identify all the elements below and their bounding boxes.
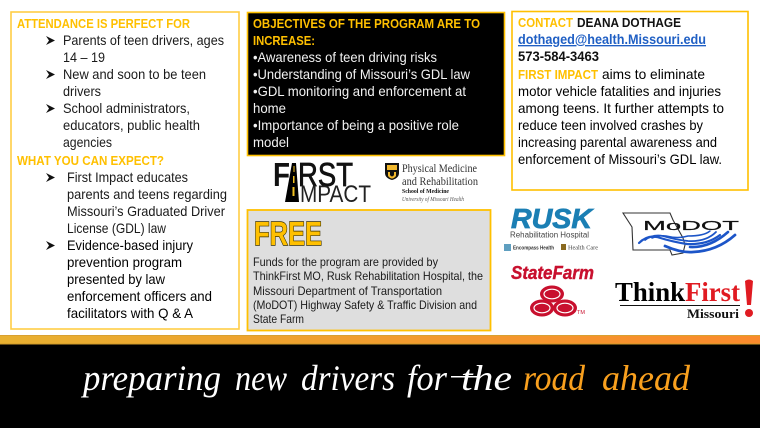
logo: Rusk Rehabilitation Hospital: Rehabilitation Hospital: [510, 230, 589, 240]
banner: tagline: ahead: [602, 358, 691, 398]
list: attendees: Parents of teen drivers, ages: [63, 32, 224, 48]
panel: free: [248, 210, 490, 330]
list: objectives: [253, 49, 471, 150]
logo: MoDOT: MoDOT: [643, 219, 740, 233]
logo: First Impact: MPACT: [300, 181, 371, 208]
logo: First Impact: [273, 156, 371, 208]
logo: State Farm: StateFarm: [511, 263, 594, 283]
logo: State Farm: TM: [577, 310, 585, 316]
logo: Physical Medicine and Rehabilitation: University of Missouri Health: [402, 196, 464, 203]
list: expectations: facilitators with Q & A: [67, 305, 194, 321]
logo: Rusk Rehabilitation Hospital: Health Care: [568, 246, 598, 252]
funding text: Missouri Department of Transportation: [253, 284, 442, 298]
list: attendees: educators, public health: [63, 117, 200, 133]
list: expectations: prevention program: [67, 254, 182, 270]
panel: contact and mission: [512, 12, 748, 190]
banner: tagline: for: [407, 358, 448, 398]
logo: Rusk Rehabilitation Hospital: Encompass Health: [513, 246, 555, 252]
funding text: [253, 255, 483, 326]
logo: ThinkFirst Missouri: Missouri: [687, 306, 739, 321]
logo: MoDOT: [623, 213, 740, 255]
logo: Physical Medicine and Rehabilitation: Physical Medicine: [402, 163, 477, 175]
list: attendees: drivers: [63, 83, 101, 99]
logo: ThinkFirst Missouri: Think: [615, 277, 685, 307]
mission text: enforcement of Missouri’s GDL law.: [518, 151, 722, 167]
list: attendees: New and soon to be teen: [63, 66, 206, 82]
banner: tagline: preparing: [80, 358, 221, 398]
heading: FREE: FREE: [254, 215, 322, 252]
logo: Physical Medicine and Rehabilitation: School of Medicine: [402, 189, 449, 195]
logo: State Farm: [511, 263, 594, 316]
orange gradient stripe: [0, 335, 760, 345]
logo: Physical Medicine and Rehabilitation: [385, 163, 478, 203]
list: expectations: [46, 169, 227, 321]
contact details: dothaged@health.Missouri.edu: [518, 32, 706, 47]
list: attendees: 14 – 19: [63, 49, 105, 65]
list: attendees: School administrators,: [63, 100, 190, 116]
list: attendees: agencies: [63, 134, 112, 150]
contact details: 573-584-3463: [518, 49, 599, 64]
funding text: ThinkFirst MO, Rusk Rehabilitation Hospital, the: [253, 269, 483, 283]
contact details: CONTACT: [518, 15, 573, 30]
funding text: (MoDOT) Highway Safety & Traffic Division and: [253, 298, 477, 312]
banner: tagline: [0, 344, 760, 428]
banner: tagline: road: [523, 358, 586, 398]
banner: tagline: drivers: [301, 358, 395, 398]
contact details: DEANA DOTHAGE: [577, 15, 681, 30]
list: expectations: parents and teens regarding: [67, 186, 227, 202]
mission text: reduce teen involved crashes by: [518, 117, 703, 133]
funding text: State Farm: [253, 312, 304, 326]
logo: First Impact: RST: [298, 156, 353, 193]
banner: tagline: the: [461, 358, 512, 398]
list: expectations: presented by law: [67, 271, 166, 287]
list: objectives: model: [253, 134, 289, 150]
logo: Rusk Rehabilitation Hospital: [504, 203, 598, 252]
heading: objectives: INCREASE:: [253, 33, 315, 48]
mission text: increasing parental awareness and: [518, 134, 717, 150]
list: expectations: Missouri’s Graduated Driver: [67, 203, 225, 219]
banner: tagline: new: [235, 358, 287, 398]
list: objectives: •Importance of being a positive role: [253, 117, 459, 133]
list: attendees: [46, 32, 224, 150]
list: objectives: •Understanding of Missouri’s GDL law: [253, 66, 471, 82]
logo: Rusk Rehabilitation Hospital: RUSK: [511, 203, 594, 234]
list: objectives: •GDL monitoring and enforcement at: [253, 83, 466, 99]
mission text: aims to eliminate: [602, 66, 705, 82]
funding text: Funds for the program are provided by: [253, 255, 438, 269]
list: expectations: enforcement officers and: [67, 288, 212, 304]
list: expectations: Evidence-based injury: [67, 237, 193, 253]
list: objectives: home: [253, 100, 286, 116]
logo: First Impact: F: [273, 156, 290, 193]
logo: ThinkFirst Missouri: First: [685, 277, 740, 307]
heading: what you can expect: WHAT YOU CAN EXPECT?: [17, 153, 164, 168]
list: expectations: License (GDL) law: [67, 220, 167, 236]
mission text: among teens. It further attempts to: [518, 100, 724, 116]
panel: attendance and expectations: [11, 12, 239, 329]
list: expectations: First Impact educates: [67, 169, 188, 185]
mission text: FIRST IMPACT: [518, 67, 598, 82]
list: objectives: •Awareness of teen driving risks: [253, 49, 437, 65]
heading: attendance: ATTENDANCE IS PERFECT FOR: [17, 16, 191, 31]
logo: Physical Medicine and Rehabilitation: and Rehabilitation: [402, 176, 478, 188]
heading: objectives: OBJECTIVES OF THE PROGRAM ARE TO: [253, 16, 480, 31]
contact details: [518, 15, 706, 64]
heading: objectives: [253, 16, 480, 48]
mission text: motor vehicle fatalities and injuries: [518, 83, 721, 99]
panel: objectives: [248, 12, 504, 156]
logo: ThinkFirst Missouri: [615, 277, 753, 321]
mission text: [518, 66, 724, 167]
